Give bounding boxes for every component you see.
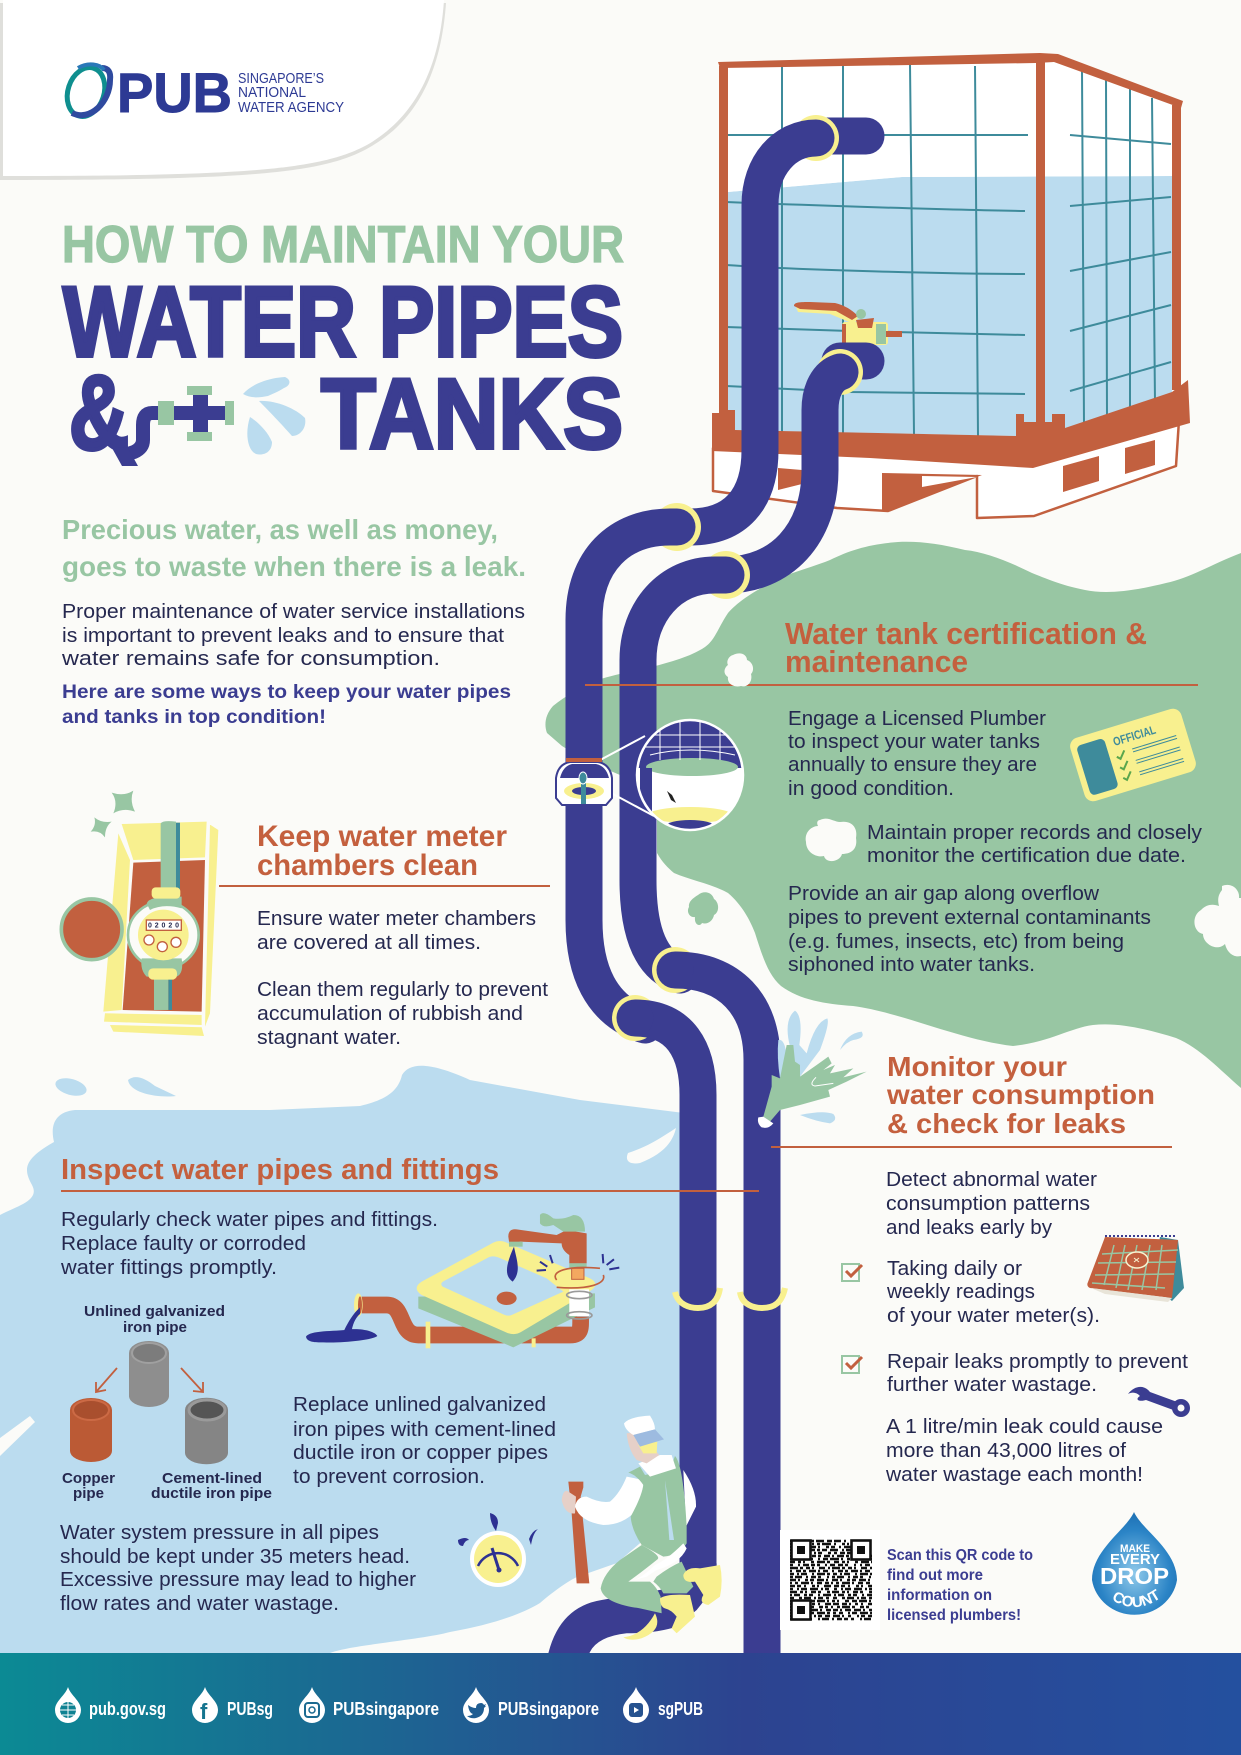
- body text: [788, 708, 1202, 976]
- pipes: [584, 115, 866, 1653]
- twitter: PUBsingapore: [498, 1698, 599, 1719]
- heading: Inspect water pipes and fittings: [61, 1154, 499, 1186]
- body text: of your water meter(s).: [887, 1305, 1100, 1327]
- title: &: [69, 354, 129, 472]
- website: [55, 1687, 166, 1723]
- body text: siphoned into water tanks.: [788, 954, 1035, 976]
- icon: calendar: [1087, 1236, 1184, 1302]
- title pipe icon: [112, 386, 234, 466]
- PUB logo: SINGAPORE’S: [238, 70, 324, 87]
- title: HOW TO MAINTAIN YOUR: [62, 216, 624, 274]
- heading: Keep water meter: [257, 820, 507, 853]
- body text: ductile iron or copper pipes: [293, 1442, 548, 1464]
- body text: Engage a Licensed Plumber: [788, 708, 1046, 730]
- logo swoosh: [61, 63, 111, 121]
- body text: further water wastage.: [887, 1374, 1097, 1396]
- PUB logo: PUB: [117, 61, 232, 124]
- pipe material labels: [62, 1303, 272, 1502]
- background splash: green: [545, 542, 1241, 1088]
- valve: [556, 758, 612, 805]
- body text: Excessive pressure may lead to higher: [60, 1569, 416, 1591]
- body text: Water system pressure in all pipes: [60, 1522, 379, 1544]
- white shirt: [575, 1477, 643, 1525]
- pallet: [712, 380, 1190, 518]
- QR caption: Scan this QR code to: [887, 1547, 1033, 1564]
- body text: Replace unlined galvanized: [293, 1394, 546, 1416]
- icon: water meter chamber: 02020: [148, 923, 179, 930]
- title: TANKS: [321, 358, 623, 469]
- pipe material labels: ductile iron pipe: [151, 1485, 272, 1502]
- intro text: [61, 514, 526, 728]
- clouds: [725, 653, 1241, 956]
- body text: iron pipes with cement-lined: [293, 1419, 556, 1441]
- pipe 2 upper run: [726, 372, 840, 575]
- title: WATER PIPES: [63, 266, 623, 377]
- QR caption: [887, 1547, 1033, 1624]
- body text: consumption patterns: [886, 1193, 1090, 1215]
- heading: water consumption: [886, 1079, 1155, 1110]
- facebook: PUBsg: [227, 1698, 273, 1719]
- icon: checkboxes: [842, 1264, 862, 1373]
- heading: & check for leaks: [887, 1108, 1126, 1139]
- heading: Monitor your: [887, 1051, 1067, 1082]
- pipe 1 upper run: [677, 138, 816, 527]
- joint: [793, 115, 839, 161]
- body text: accumulation of rubbish and: [257, 1003, 523, 1025]
- title: [62, 216, 624, 472]
- pipe 1 top stub: [816, 118, 866, 154]
- youtube: sgPUB: [658, 1698, 703, 1719]
- background splash: light blue: [0, 1066, 700, 1653]
- leak splash: [758, 1011, 867, 1128]
- pipe material labels: iron pipe: [123, 1319, 187, 1336]
- tap: [794, 302, 902, 345]
- body text: weekly readings: [886, 1281, 1035, 1303]
- body text: (e.g. fumes, insects, etc) from being: [788, 931, 1124, 953]
- intro text: Proper maintenance of water service installations: [62, 601, 525, 623]
- pipe 1 lower run: [635, 1018, 698, 1566]
- youtube: [623, 1687, 703, 1723]
- footer: [0, 1653, 1241, 1755]
- body text: stagnant water.: [257, 1027, 401, 1049]
- twitter: [463, 1687, 599, 1723]
- arrows: [96, 1368, 203, 1392]
- section: water tank certification: [585, 617, 1241, 976]
- body text: Maintain proper records and closely: [867, 822, 1202, 844]
- joint: [817, 349, 863, 395]
- intro text: goes to waste when there is a leak.: [62, 551, 526, 582]
- facebook: [192, 1687, 273, 1724]
- heading: maintenance: [785, 645, 968, 679]
- website: pub.gov.sg: [89, 1698, 166, 1719]
- body text: Detect abnormal water: [886, 1169, 1097, 1191]
- body text: [885, 1169, 1188, 1486]
- joint: [612, 995, 658, 1041]
- overalls: [628, 1456, 687, 1557]
- tank water: [728, 176, 1172, 436]
- icon: pressure gauge: [458, 1513, 538, 1587]
- body text: should be kept under 35 meters head.: [60, 1546, 410, 1568]
- pipe bottom bend: [548, 1563, 717, 1653]
- QR code: [780, 1530, 880, 1630]
- body text: Regularly check water pipes and fittings.: [61, 1209, 438, 1231]
- hand: [562, 1491, 576, 1513]
- body text: Ensure water meter chambers: [257, 908, 536, 930]
- section: monitor water consumption: [758, 1010, 1190, 1630]
- body text: Provide an air gap along overflow: [788, 883, 1100, 905]
- pipe 2 middle run: [638, 575, 726, 975]
- make every drop count badge: COUNT: [1114, 1588, 1158, 1608]
- heading: [257, 820, 507, 882]
- body text: Clean them regularly to prevent: [257, 979, 548, 1001]
- PUB logo: NATIONAL: [238, 84, 306, 101]
- heading: [785, 617, 1147, 679]
- intro text: Precious water, as well as money,: [62, 514, 498, 545]
- body text: flow rates and water wastage.: [60, 1593, 339, 1615]
- body text: [257, 908, 548, 1049]
- icon: pipe cylinders: [70, 1341, 228, 1464]
- boots: [683, 1565, 722, 1605]
- body text: A 1 litre/min leak could cause: [886, 1416, 1163, 1438]
- make every drop count badge: DROP: [1100, 1563, 1169, 1589]
- pipe bands: [675, 1288, 785, 1308]
- intro text: and tanks in top condition!: [62, 706, 326, 728]
- body text: water wastage each month!: [885, 1464, 1143, 1486]
- instagram: PUBsingapore: [333, 1698, 439, 1719]
- small green cloud: [688, 892, 718, 925]
- heading: Water tank certification &: [785, 617, 1147, 651]
- background: white wisps and patch in splash: [0, 1128, 702, 1653]
- make every drop count badge: MAKE: [1120, 1543, 1150, 1555]
- joint: [652, 947, 698, 993]
- icon: water meter chamber: [61, 791, 218, 1036]
- body text: Taking daily or: [887, 1258, 1022, 1280]
- pipe material labels: Cement-lined: [162, 1470, 262, 1487]
- title water drops: [243, 377, 305, 454]
- tank grid: [726, 64, 1171, 436]
- pipe 2 top stub: [840, 342, 866, 380]
- body text: to prevent corrosion.: [293, 1466, 485, 1488]
- icon: official certificate card: [1068, 706, 1198, 804]
- body text: in good condition.: [788, 778, 954, 800]
- PUB logo: [61, 61, 344, 124]
- body text: monitor the certification due date.: [867, 845, 1186, 867]
- held pipe: [568, 1482, 589, 1583]
- QR caption: information on: [887, 1587, 992, 1604]
- QR caption: licensed plumbers!: [887, 1607, 1021, 1624]
- collar and head: [638, 1455, 676, 1477]
- intro text: water remains safe for consumption.: [61, 648, 440, 670]
- magnifier and valve detail: [556, 720, 746, 832]
- tank frame: [718, 53, 1183, 428]
- joint: [702, 551, 750, 599]
- joint: [653, 503, 701, 551]
- intro text: is important to prevent leaks and to ensure that: [62, 625, 504, 647]
- pipe material labels: Unlined galvanized: [84, 1303, 225, 1320]
- body text: are covered at all times.: [257, 932, 481, 954]
- magnifier lines: [589, 736, 654, 816]
- pipe material labels: Copper: [62, 1470, 115, 1487]
- logo card: [0, 0, 446, 180]
- PUB logo: WATER AGENCY: [238, 99, 344, 116]
- body text: to inspect your water tanks: [788, 731, 1040, 753]
- body text: annually to ensure they are: [788, 754, 1037, 776]
- instagram: [299, 1687, 439, 1723]
- make every drop count badge: EVERY: [1110, 1551, 1160, 1568]
- magnifier lens: [636, 720, 746, 832]
- pipe material labels: pipe: [73, 1485, 104, 1502]
- body text: and leaks early by: [886, 1217, 1052, 1239]
- intro text: Here are some ways to keep your water pipes: [62, 681, 511, 703]
- body text: more than 43,000 litres of: [886, 1440, 1126, 1462]
- body text: water fittings promptly.: [60, 1257, 277, 1279]
- body text: Repair leaks promptly to prevent: [887, 1351, 1188, 1373]
- section: inspect water pipes and fittings: [60, 1154, 759, 1653]
- icon: leaking sink: [306, 1213, 619, 1348]
- icon: worker on pipe: [548, 1416, 722, 1653]
- facebook: f: [200, 1699, 208, 1724]
- QR caption: find out more: [887, 1567, 983, 1584]
- body text: pipes to prevent external contaminants: [788, 907, 1151, 929]
- water tank: [712, 53, 1190, 518]
- pipe 1 middle run: [584, 527, 677, 1025]
- section: keep water meter chambers clean: [61, 791, 550, 1049]
- pipe 2 lower run: [675, 970, 762, 1653]
- body text: [60, 1209, 556, 1615]
- icon: official certificate card: OFFICIAL: [1111, 723, 1158, 749]
- heading: [886, 1051, 1155, 1139]
- make every drop count badge: [1092, 1512, 1177, 1615]
- heading: chambers clean: [257, 849, 478, 882]
- icon: wrench: [1128, 1387, 1190, 1417]
- body text: Replace faulty or corroded: [61, 1233, 306, 1255]
